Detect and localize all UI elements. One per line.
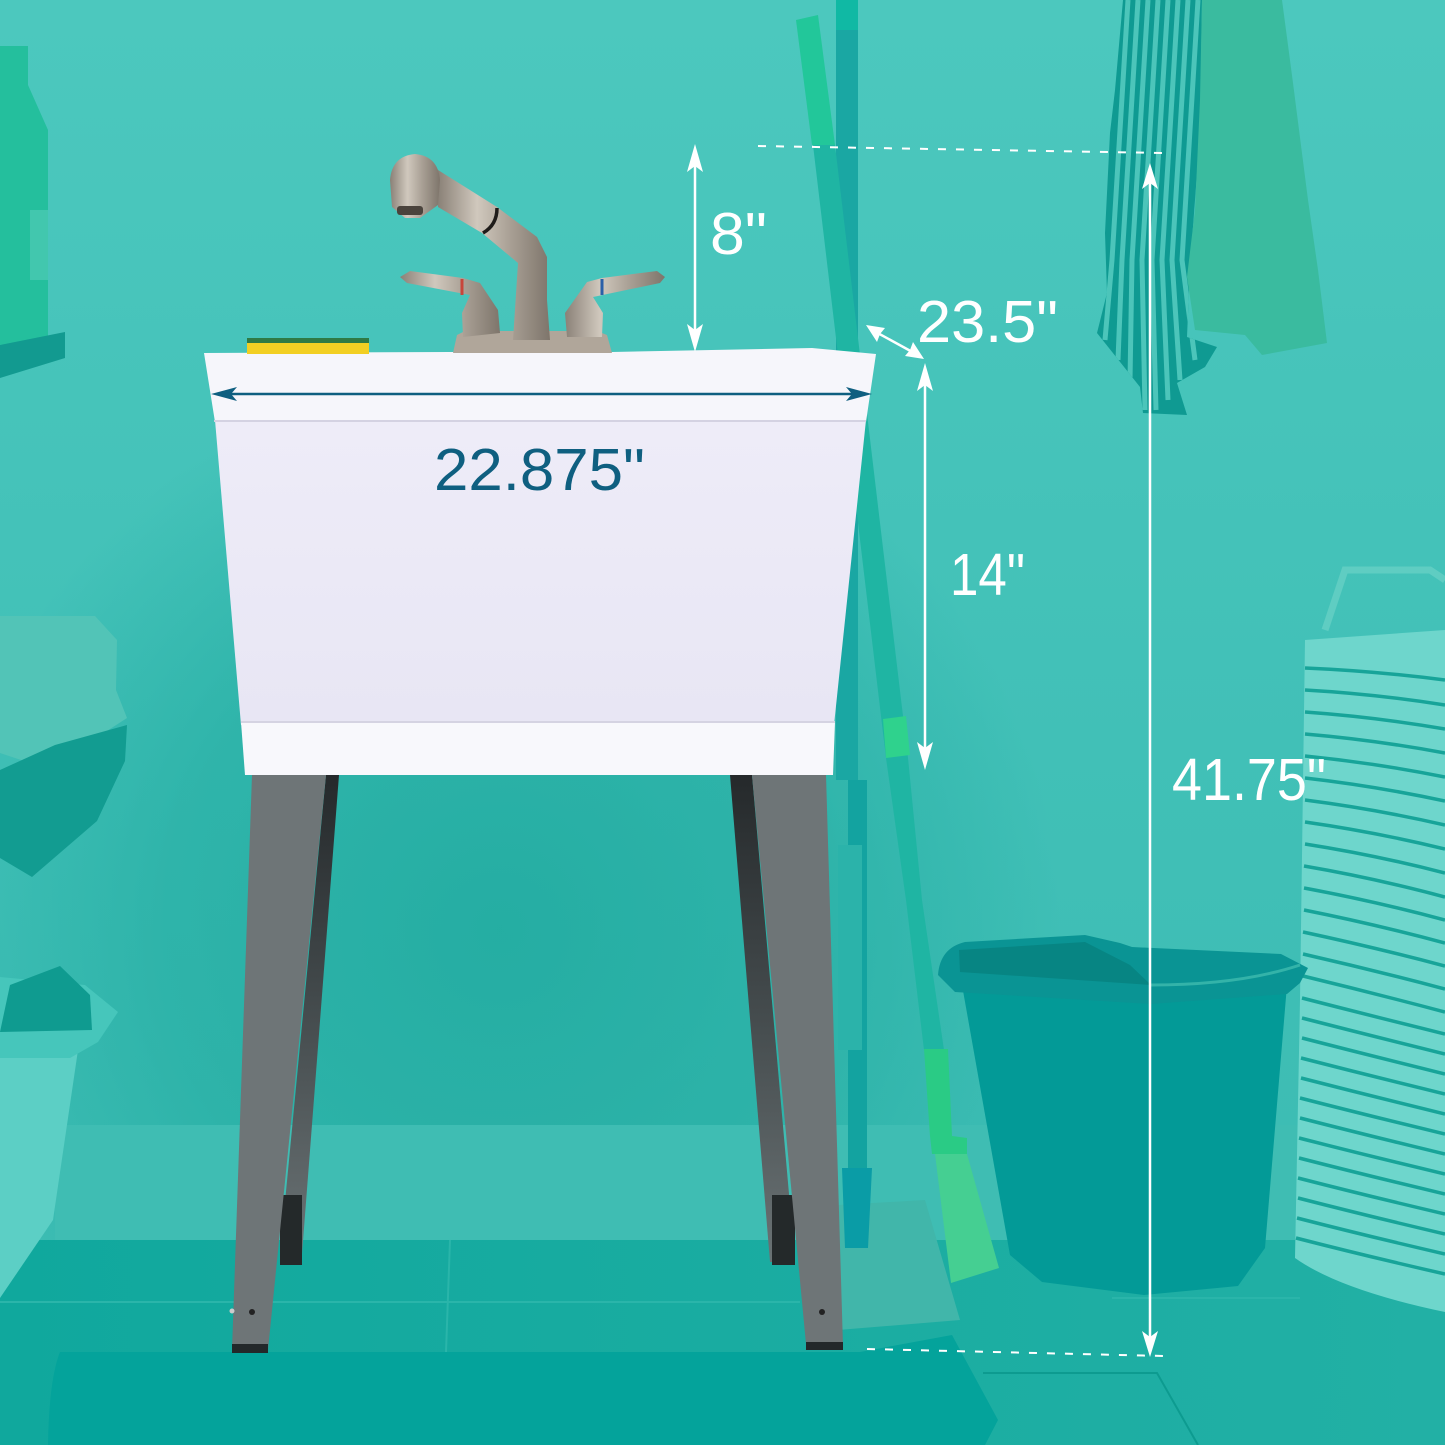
background: stacked towels [0,616,127,877]
background: bucket [938,935,1308,1295]
dimension: depth 23.5 inches [866,289,1058,359]
faucet [390,154,665,353]
dimension: total height 41.75 inches [758,146,1326,1357]
background: laundry basket [0,966,118,1298]
dimension: tub height 14 inches [917,363,1025,770]
sponge [247,338,369,354]
background: green sweater [1187,0,1327,355]
sink legs [230,775,843,1353]
dimension: total height 41.75 inches: 41.75" [1172,747,1326,813]
background: detergent bottle and shelf [0,46,65,378]
sink tub [204,348,876,775]
background: striped shirt [1097,0,1217,415]
dimension: depth 23.5 inches: 23.5" [917,289,1058,355]
dimension: tub width 22.875 inches [211,387,872,503]
dimension: faucet height 8 inches: 8" [710,201,767,267]
dimension: tub height 14 inches: 14" [950,542,1025,608]
background: mop and broom handles [796,0,999,1330]
dimension: faucet height 8 inches [687,144,767,352]
dimension: tub width 22.875 inches: 22.875" [434,437,645,503]
background: striped hamper [1295,570,1445,1312]
